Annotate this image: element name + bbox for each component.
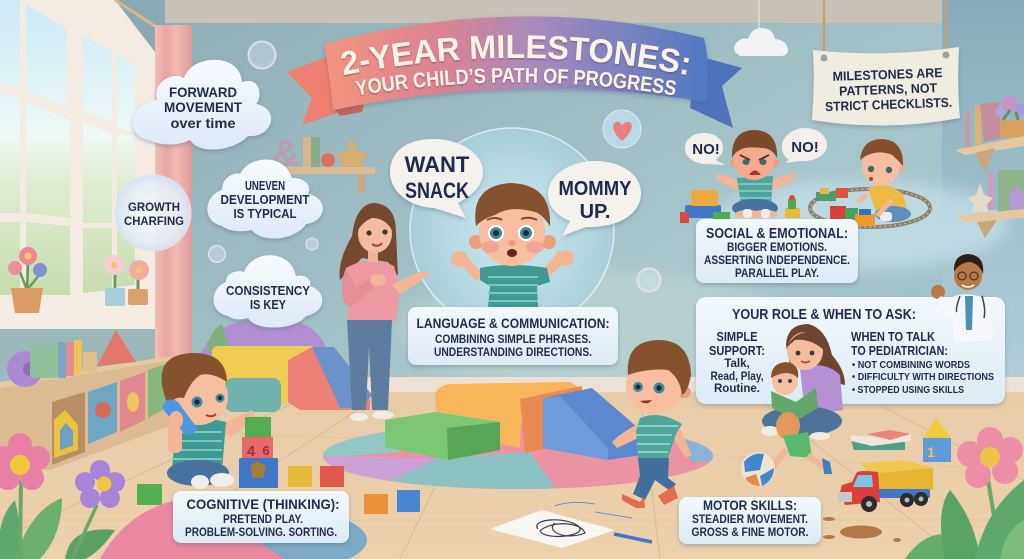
- panel: language and communication: LANGUAGE & COMMUNICATION:: [416, 316, 610, 331]
- cloud: uneven development: DEVELOPMENT: [220, 193, 310, 207]
- window: [0, 0, 165, 369]
- title ribbon: [287, 16, 742, 128]
- doctor waving: [931, 254, 993, 342]
- when to talk column: TO PEDIATRICIAN:: [851, 343, 948, 358]
- simple support column: Talk,: [724, 358, 750, 370]
- panel: your role and when to ask: YOUR ROLE & WHEN TO ASK:: [732, 307, 916, 323]
- panel: social and emotional: [696, 219, 858, 283]
- cloud: uneven development: IS TYPICAL: [234, 207, 297, 221]
- simple support column: Read, Play,: [710, 371, 764, 383]
- bubble: growth charting: GROWTH: [128, 200, 180, 214]
- toy dump truck: [838, 460, 933, 512]
- green foam block: [385, 412, 500, 460]
- panel: social and emotional: PARALLEL PLAY.: [735, 268, 819, 280]
- panel: social and emotional: ASSERTING INDEPENDENCE.: [704, 255, 850, 267]
- panel: language and communication: COMBINING SIMPLE PHRASES.: [435, 334, 591, 346]
- panel: cognitive: [173, 491, 349, 543]
- speech bubble: mommy up: [548, 161, 641, 236]
- train toddler: [857, 139, 911, 222]
- mud splat: [823, 517, 901, 542]
- panel: social and emotional: SOCIAL & EMOTIONAL:: [706, 226, 848, 242]
- panel: motor skills: GROSS & FINE MOTOR.: [692, 527, 808, 539]
- orange foam block: [435, 382, 582, 453]
- panel: language and communication: UNDERSTANDING DIRECTIONS.: [434, 347, 592, 359]
- panel: cognitive: COGNITIVE (THINKING):: [186, 496, 340, 512]
- central toddler: [451, 183, 574, 307]
- mother reading with child: [761, 324, 845, 440]
- cloud: forward movement: FORWARD: [169, 85, 237, 100]
- running toddler and ball: [741, 432, 832, 486]
- walking toddler: [612, 340, 692, 508]
- cloud: consistency: CONSISTENCY: [226, 283, 310, 298]
- train track: [810, 189, 930, 227]
- bottom right flower and leaves: [905, 427, 1024, 559]
- panel: cognitive: PRETEND PLAY.: [223, 514, 303, 526]
- sign text: STRICT CHECKLISTS.: [825, 95, 952, 114]
- soft play set: [200, 318, 372, 412]
- floating bubbles: [208, 41, 661, 292]
- Social emotional toddlers: [680, 130, 930, 227]
- cloud: uneven development: UNEVEN: [245, 179, 285, 193]
- sign text: [824, 65, 952, 114]
- bubble: growth charting: CHARFING: [124, 214, 184, 228]
- cloud: uneven development: [207, 159, 323, 239]
- curtain: [155, 25, 192, 370]
- title text: YOUR CHILD’S PATH OF PROGRESS: [354, 68, 676, 97]
- NO speech bubble left: NO!: [692, 141, 720, 158]
- rug: [323, 423, 713, 489]
- panel: motor skills: MOTOR SKILLS:: [703, 498, 797, 513]
- scribble drawing: [490, 502, 652, 548]
- title text: [340, 35, 690, 97]
- angry toddler: [715, 130, 796, 218]
- panel: social and emotional: BIGGER EMOTIONS.: [727, 242, 827, 254]
- bottom left flowers: [0, 433, 125, 559]
- cognitive toddler with toy phone: [162, 353, 256, 489]
- when to talk column: • DIFFICULTY WITH DIRECTIONS: [852, 371, 994, 383]
- mother standing: [340, 203, 431, 421]
- blue foam ramp: [543, 388, 660, 460]
- panel: motor skills: STEADIER MOVEMENT.: [692, 514, 808, 526]
- bubble: growth charting: [115, 175, 191, 251]
- sign text: PATTERNS, NOT: [839, 80, 937, 99]
- bottom pink rug: [100, 498, 367, 559]
- speech bubble: mommy up: UP.: [580, 201, 610, 223]
- speech bubble: want snack: WANT: [405, 152, 470, 177]
- heart bubble: [603, 110, 641, 148]
- NO speech bubble right: [782, 128, 827, 163]
- hanging cloud: [734, 0, 788, 56]
- NO speech bubble left: [685, 133, 725, 165]
- speech bubble: mommy up: MOMMY: [558, 178, 632, 200]
- simple support column: Routine.: [714, 383, 760, 395]
- block tower and toy blocks: 4: [247, 443, 256, 460]
- speech bubble: want snack: SNACK: [405, 178, 469, 203]
- cloud: forward movement: MOVEMENT: [164, 100, 243, 115]
- cloud: forward movement: [133, 60, 271, 150]
- wall shelf with toys: &: [272, 133, 300, 175]
- toy train: [816, 188, 875, 226]
- wall shelf with toys: [270, 133, 375, 192]
- books and shape toy: [851, 418, 951, 462]
- panel: cognitive: PROBLEM-SOLVING. SORTING.: [185, 527, 337, 539]
- when to talk column: • STOPPED USING SKILLS: [852, 384, 964, 396]
- bookcase: [0, 330, 172, 470]
- central bubble glow: [410, 128, 614, 332]
- block tower and toy blocks: [137, 417, 420, 514]
- NO speech bubble right: NO!: [791, 139, 819, 156]
- central foam blocks and rug: [320, 382, 720, 495]
- panel: your role and when to ask: [696, 297, 1005, 404]
- when to talk column: WHEN TO TALK: [851, 329, 936, 344]
- books and shape toy: 1: [927, 444, 935, 460]
- windowsill flowers: [8, 247, 149, 313]
- speech bubble: want snack: [390, 139, 483, 218]
- simple support column: SUPPORT:: [709, 343, 765, 358]
- panel: motor skills: [679, 497, 821, 544]
- block tower and toy blocks: 6: [262, 443, 270, 458]
- when to talk column: • NOT COMBINING WORDS: [852, 359, 970, 371]
- wood floor: [0, 392, 1024, 559]
- when to talk column: [851, 329, 994, 396]
- right wall shelves: [955, 96, 1024, 238]
- hanging sign: [812, 0, 960, 126]
- cloud: forward movement: over time: [170, 116, 236, 131]
- simple support column: [709, 329, 765, 395]
- cloud: consistency: [214, 255, 322, 328]
- cloud: consistency: IS KEY: [250, 297, 286, 312]
- panel: language and communication: [408, 307, 618, 365]
- toy blocks: [680, 190, 800, 223]
- simple support column: SIMPLE: [716, 329, 758, 344]
- title text: 2-YEAR MILESTONES:: [340, 35, 690, 77]
- sign text: MILESTONES ARE: [832, 65, 943, 84]
